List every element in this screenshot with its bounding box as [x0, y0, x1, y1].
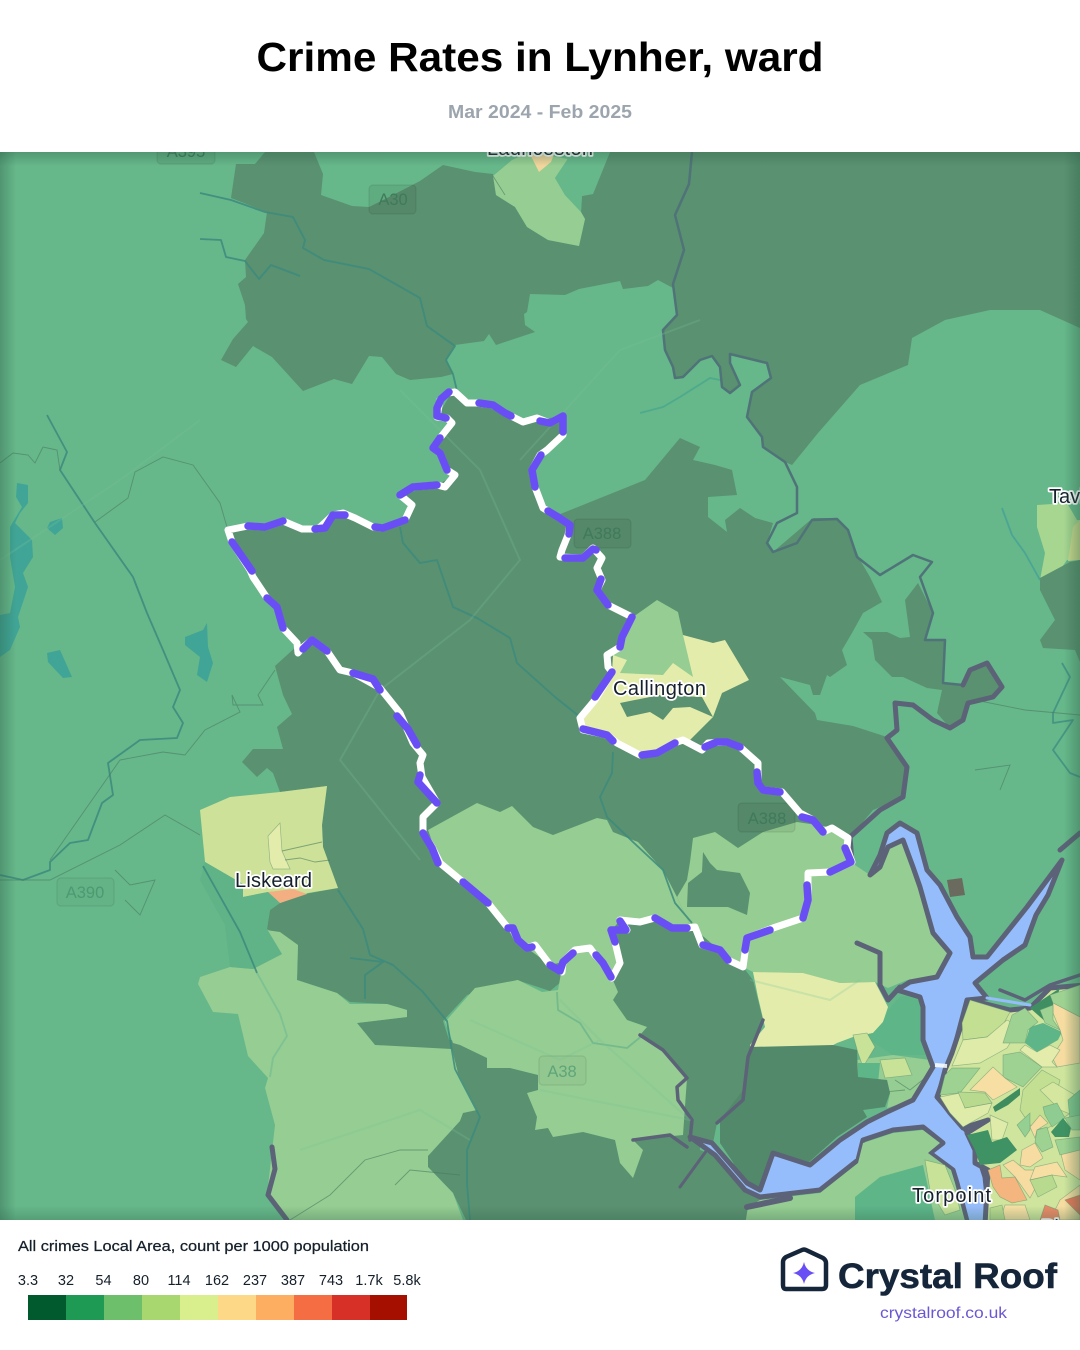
legend tick labels: 387 — [281, 1273, 305, 1289]
region: Torpoint peninsula — [745, 1130, 966, 1225]
lakes — [0, 483, 213, 682]
thin administrative boundaries — [0, 176, 1080, 1220]
legend tick labels: 3.3 — [18, 1273, 38, 1289]
ward outline white — [228, 392, 852, 978]
title: Crime Rates in Lynher, ward — [256, 34, 824, 80]
road label: A388 south: A388 — [748, 810, 786, 828]
legend tick labels: 237 — [243, 1273, 267, 1289]
estuary bridge — [935, 1065, 947, 1066]
legend tick labels — [18, 1273, 421, 1289]
region: Callington dark hole — [620, 695, 713, 720]
logo: Crystal Roof — [783, 1250, 1057, 1322]
region: Callington — [580, 600, 749, 755]
road label: A30 — [369, 185, 416, 214]
road label: A390 — [57, 878, 114, 906]
rivers — [0, 152, 1080, 1220]
legend tick labels: 1.7k — [355, 1273, 383, 1289]
region: ward south light — [428, 803, 690, 978]
water: Tamar estuary — [690, 823, 1062, 1225]
road label: A30: A30 — [378, 191, 408, 209]
ward boundary: Lynher — [228, 392, 852, 978]
place label: Callington: Callington — [613, 678, 706, 700]
road label: A388 north — [574, 519, 631, 548]
road label: A388 south — [738, 803, 795, 832]
legend tick labels: 80 — [133, 1273, 149, 1289]
region: south west light block — [198, 930, 477, 1220]
region: dark blob in ward — [687, 852, 750, 915]
region: south dark block — [428, 1040, 790, 1220]
faint roads — [0, 320, 860, 1150]
region: Liskeard orange ward — [268, 889, 307, 903]
road label: A388 north: A388 — [583, 525, 621, 543]
region: central dark mass including ward — [228, 392, 907, 1143]
region: Launceston east green — [555, 159, 606, 212]
region: Plymouth district tiles — [938, 985, 1080, 1225]
region: Liskeard — [200, 786, 338, 903]
road label: A38: A38 — [547, 1063, 577, 1081]
ward outline purple dashes — [232, 392, 851, 977]
place label: Torpoint: Torpoint — [912, 1185, 991, 1207]
coast lines — [268, 663, 1080, 1220]
legend tick labels: 5.8k — [393, 1273, 421, 1289]
legend tick labels: 114 — [167, 1273, 191, 1289]
map edge vignette — [0, 152, 1080, 1220]
region: yellow block — [750, 972, 888, 1047]
region: Liskeard inner yellow — [268, 823, 290, 869]
region: Tavistock dark — [1040, 560, 1080, 662]
road label: A38 — [539, 1056, 586, 1085]
place label: Liskeard: Liskeard — [235, 870, 312, 892]
region: dark island south of yellow block — [720, 1045, 890, 1175]
region: Launceston middle band — [493, 152, 585, 246]
icon: house with star — [783, 1250, 826, 1289]
region: north dark band — [221, 152, 1080, 465]
region: base green west of dark — [200, 862, 282, 969]
region: A38 light block — [445, 948, 687, 1178]
region: Launceston peach — [531, 154, 554, 172]
legend tick labels: 743 — [319, 1273, 343, 1289]
legend tick labels: 32 — [58, 1273, 74, 1289]
region: Callington inner green — [613, 600, 693, 677]
legend — [18, 1238, 421, 1320]
region: Tavistock patch — [1037, 503, 1080, 580]
legend tick labels: 54 — [95, 1273, 112, 1289]
place label: Launceston: Launceston — [487, 138, 593, 160]
road label: A395: A395 — [167, 143, 205, 161]
legend colour scale — [28, 1295, 407, 1320]
region: Tavistock yellow-green — [1068, 520, 1080, 561]
subtitle: date range: Mar 2024 - Feb 2025 — [448, 102, 632, 122]
region: east dark blob — [863, 583, 1002, 728]
feature: brown patch on estuary shore — [947, 878, 965, 897]
legend tick labels: 162 — [205, 1273, 229, 1289]
region: ward south east and east light block — [677, 822, 950, 988]
website url: crystalroof.co.uk — [880, 1305, 1008, 1322]
legend title: All crimes Local Area, count per 1000 population — [18, 1238, 369, 1255]
region: estuary small tiles — [853, 993, 933, 1108]
wordmark: Crystal Roof — [838, 1257, 1057, 1296]
road label: A390: A390 — [66, 884, 104, 902]
road label: A395 — [156, 152, 216, 164]
